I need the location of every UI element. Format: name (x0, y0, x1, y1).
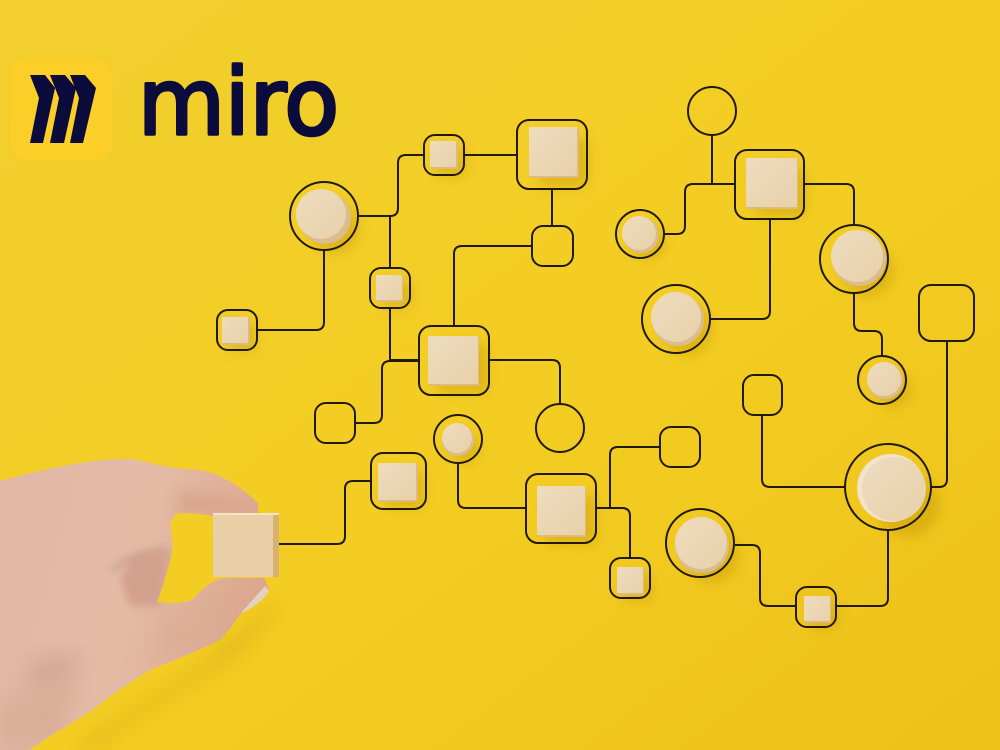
thumb nail (240, 586, 269, 614)
hand shadow (70, 600, 285, 750)
hand shading (0, 490, 258, 750)
circle nodes with wooden discs (290, 182, 931, 577)
flowchart connectors (257, 136, 947, 606)
empty square nodes (315, 226, 974, 467)
hand holding wooden block (0, 459, 279, 750)
large disc highlight (857, 454, 925, 522)
logo icon (10, 58, 112, 160)
logo wordmark: miro (138, 49, 339, 156)
hand silhouette (0, 459, 269, 750)
node shadows (229, 138, 940, 629)
wooden block held (213, 513, 279, 577)
empty circle nodes (536, 87, 736, 452)
square nodes with wooden blocks (217, 120, 836, 627)
